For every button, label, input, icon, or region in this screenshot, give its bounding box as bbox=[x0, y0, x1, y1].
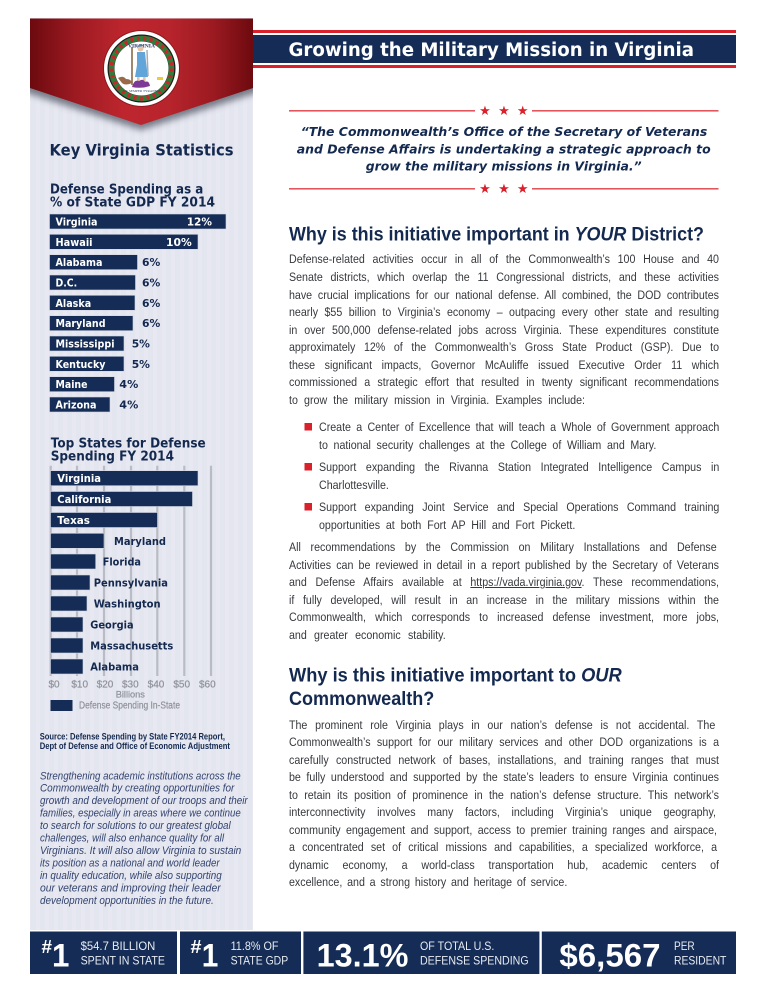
quote text: “The Commonwealth’s Office of the Secretary of Veterans bbox=[301, 125, 708, 140]
stat: spending per resident: PER bbox=[674, 941, 695, 953]
axis labels: $10 bbox=[71, 680, 88, 690]
body text: recommendations paragraph: Commonwealth, which corresponds to increased defense investment, more jobs, bbox=[289, 610, 719, 624]
body text: commonwealth paragraph: Commonwealth’s support for our military services and other DOD organizations is a bbox=[289, 735, 719, 749]
italic sidebar paragraph: growth and development of our troops and their bbox=[40, 795, 249, 807]
chart: defense spending as percent of GDP bbox=[50, 183, 226, 412]
italic sidebar paragraph: development opportunities in the future. bbox=[40, 895, 214, 907]
icon: Virginia state seal bbox=[103, 30, 180, 107]
stat: number one GDP: STATE GDP bbox=[231, 956, 288, 968]
state labels: California bbox=[57, 493, 111, 506]
quote with star dividers bbox=[289, 104, 718, 197]
state labels bbox=[57, 472, 174, 674]
italic sidebar paragraph: challenges, will also enhance quality for all bbox=[40, 832, 224, 844]
axis labels: $50 bbox=[173, 680, 190, 690]
chart heading: Spending FY 2014 bbox=[51, 450, 174, 465]
body text: your district paragraph: Defense-related activities occur in all of the Commonwealth’s 100 House and 40 bbox=[289, 252, 719, 266]
stat: share of defense spending: DEFENSE SPENDING bbox=[420, 956, 529, 968]
axis labels: $60 bbox=[199, 680, 216, 690]
body text: your district paragraph: commissioned a strategic effort that resulted in twenty significant recommendations bbox=[289, 375, 719, 389]
stat: share of defense spending: 13.1% bbox=[317, 938, 408, 974]
bar values: 6% bbox=[142, 317, 160, 330]
stat: number one GDP: 11.8% OF bbox=[231, 941, 278, 953]
heading: key statistics: Key Virginia Statistics bbox=[50, 140, 234, 159]
body text: recommendations paragraph: if fully developed, will result in an increase in the military missions within the bbox=[289, 593, 719, 607]
quote text: and Defense Affairs is undertaking a strategic approach to bbox=[297, 142, 711, 157]
body text: recommendations paragraph: and greater economic stability. bbox=[289, 628, 446, 642]
chart heading: Top States for Defense bbox=[51, 436, 206, 451]
axis labels bbox=[48, 680, 216, 700]
bullet list: opportunities at both Fort AP Hill and Fort Pickett. bbox=[319, 518, 575, 532]
bar labels bbox=[56, 216, 114, 412]
chart: top states for defense spending bbox=[48, 436, 216, 712]
chart heading: Defense Spending as a bbox=[50, 183, 203, 198]
italic sidebar paragraph: Virginians. It will also allow Virginia to sustain bbox=[40, 845, 241, 857]
bottom star divider: ★ bbox=[479, 182, 491, 197]
stat: number one spending bbox=[30, 932, 177, 974]
axis labels: $40 bbox=[148, 680, 165, 690]
body text: commonwealth paragraph: excellence, and a strong history and heritage of service. bbox=[289, 875, 567, 889]
body text: commonwealth paragraph: to retain its position of prominence in the nation’s defense structure. This network’s bbox=[289, 788, 719, 802]
stat: share of defense spending: OF TOTAL U.S. bbox=[420, 941, 494, 953]
bar labels: Virginia bbox=[56, 216, 98, 228]
bar labels: Kentucky bbox=[56, 358, 106, 371]
bullet list: Support expanding Joint Service and Special Operations Command training bbox=[319, 500, 719, 514]
red ribbon with seal bbox=[24, 18, 259, 130]
bar labels: Mississippi bbox=[56, 338, 114, 350]
stat: number one spending: SPENT IN STATE bbox=[81, 956, 165, 968]
chart heading bbox=[51, 436, 206, 465]
bar labels: Hawaii bbox=[56, 236, 92, 249]
bar values: 5% bbox=[132, 358, 150, 371]
heading: our commonwealth bbox=[289, 666, 622, 710]
body text: your district paragraph: Senate districts, which overlap the 11 Congressional districts, and these activities bbox=[289, 270, 719, 284]
header banner bbox=[253, 30, 736, 68]
axis labels: $30 bbox=[122, 680, 139, 690]
state labels: Alabama bbox=[90, 660, 139, 674]
bars bbox=[50, 471, 198, 674]
bar labels: Alabama bbox=[56, 256, 102, 269]
chart heading: % of State GDP FY 2014 bbox=[50, 196, 215, 211]
body text: your district paragraph: approximately 12% of the Commonwealth’s Gross State Product (GSP). Due to bbox=[289, 340, 719, 354]
bar values: 4% bbox=[119, 378, 138, 391]
bullet markers bbox=[304, 423, 312, 510]
bar values: 4% bbox=[119, 398, 138, 412]
bar values: 6% bbox=[142, 276, 160, 290]
body text: your district paragraph: nearly $55 billion to Virginia’s economy – outpacing every other state and resulting bbox=[289, 305, 719, 319]
stat: number one spending: 1 bbox=[52, 938, 69, 974]
bullet list: Support expanding the Rivanna Station Integrated Intelligence Campus in bbox=[319, 460, 719, 474]
chart heading bbox=[50, 183, 215, 211]
state labels: Texas bbox=[57, 514, 90, 527]
bullet list: to national security challenges at the College of William and Mary. bbox=[319, 438, 656, 452]
title: Growing the Military Mission in Virginia bbox=[288, 40, 694, 61]
legend bbox=[50, 700, 180, 712]
bullet list: Create a Center of Excellence that will teach a Whole of Government approach bbox=[319, 420, 719, 434]
bottom star divider: ★ bbox=[517, 182, 529, 197]
italic sidebar paragraph: to search for solutions to our greatest global bbox=[40, 820, 231, 832]
quote text bbox=[297, 125, 711, 175]
bar values bbox=[119, 216, 212, 412]
top star divider: ★ bbox=[498, 104, 510, 119]
body text: commonwealth paragraph: a concentrated set of critical missions and capabilities, a specialized workforce, a bbox=[289, 840, 717, 854]
stat: spending per resident: $6,567 bbox=[559, 938, 660, 974]
heading: our commonwealth: Why is this initiative important to OUR bbox=[289, 666, 622, 687]
italic sidebar paragraph: its position as a national and world leader bbox=[40, 857, 221, 869]
top star divider: ★ bbox=[479, 104, 491, 119]
italic sidebar paragraph: Commonwealth by creating opportunities for bbox=[40, 783, 235, 795]
legend: Defense Spending In-State bbox=[79, 700, 180, 712]
bar values: 10% bbox=[166, 236, 192, 249]
bar labels: Maryland bbox=[56, 317, 106, 330]
stat: spending per resident bbox=[542, 932, 736, 974]
quote text: grow the military missions in Virginia.” bbox=[366, 160, 642, 175]
sidebar panel bbox=[30, 18, 253, 930]
state labels: Florida bbox=[103, 556, 141, 568]
bar values: 5% bbox=[132, 338, 150, 350]
state labels: Virginia bbox=[57, 472, 101, 485]
bar labels: D.C. bbox=[56, 276, 77, 290]
bullet list: Charlottesville. bbox=[319, 478, 389, 492]
state labels: Pennsylvania bbox=[94, 576, 168, 590]
body text: commonwealth paragraph: dynamic economy, a world-class transportation hub, academic centers of bbox=[289, 858, 719, 872]
bottom statistics bar bbox=[30, 932, 736, 974]
body text: recommendations paragraph: Activities can be reviewed in detail in a report published by the Secretary of Veterans bbox=[289, 558, 719, 572]
body text: your district paragraph: to grow the military mission in Virginia. Examples include: bbox=[289, 393, 585, 407]
state labels: Washington bbox=[94, 598, 161, 610]
body text: recommendations paragraph: and Defense Affairs available at https://vada.virginia.gov. These recommendations, bbox=[289, 575, 719, 589]
stat: spending per resident: RESIDENT bbox=[674, 956, 726, 968]
top star divider bbox=[289, 104, 718, 119]
source note bbox=[40, 732, 230, 751]
body text: your district paragraph: have crucial implications for our national defense. All combined, the DOD contributes bbox=[289, 288, 719, 302]
italic sidebar paragraph bbox=[40, 770, 249, 907]
state labels: Maryland bbox=[114, 535, 166, 548]
state labels: Massachusetts bbox=[90, 640, 174, 652]
italic sidebar paragraph: our veterans and improving their leader bbox=[40, 882, 222, 894]
icon: Virginia state seal: SIC SEMPER TYRANNIS bbox=[123, 89, 160, 93]
axis labels: $0 bbox=[48, 680, 60, 690]
bar labels: Maine bbox=[56, 378, 88, 391]
body text: commonwealth paragraph: interconnectivity involves many factors, including Virginia’s unique geography, bbox=[289, 805, 716, 819]
stat: share of defense spending bbox=[303, 932, 539, 974]
italic sidebar paragraph: in quality education, while also supporting bbox=[40, 870, 222, 882]
bottom star divider: ★ bbox=[498, 182, 510, 197]
body text: commonwealth paragraph: be fully understood and supported by the state’s leaders to ensure Virginia continues bbox=[289, 770, 719, 784]
stat: number one GDP: 1 bbox=[202, 938, 218, 974]
bar values: 12% bbox=[187, 216, 212, 228]
state labels: Georgia bbox=[90, 618, 134, 632]
body text: your district paragraph: these significant impacts, Governor McAuliffe issued Executive Order 11 which bbox=[289, 358, 719, 372]
heading: our commonwealth: Commonwealth? bbox=[289, 689, 434, 710]
heading: your district: Why is this initiative important in YOUR District? bbox=[289, 225, 704, 246]
bar labels: Arizona bbox=[56, 398, 96, 412]
bar values: 6% bbox=[142, 256, 160, 269]
bar labels: Alaska bbox=[56, 297, 91, 310]
icon: Virginia state seal: VIRGINIA bbox=[128, 44, 155, 50]
italic sidebar paragraph: families, especially in areas where we continue bbox=[40, 808, 241, 820]
axis labels: Billions bbox=[116, 690, 145, 700]
body text: recommendations paragraph: All recommendations by the Commission on Military Installations and Defense bbox=[289, 540, 717, 554]
body text: commonwealth paragraph: The prominent role Virginia plays in our nation’s defense is not accidental. The bbox=[289, 718, 715, 732]
body text: commonwealth paragraph: carefully constructed network of bases, installations, and training ranges that must bbox=[289, 753, 719, 767]
stat: number one spending: # bbox=[42, 937, 52, 957]
stat: number one GDP bbox=[180, 932, 301, 974]
stat: number one spending: $54.7 BILLION bbox=[81, 941, 155, 953]
body text: your district paragraph: in over 500,000 defense-related jobs across Virginia. These expenditures constitute bbox=[289, 323, 719, 337]
stat: number one GDP: # bbox=[190, 937, 202, 957]
axis labels: $20 bbox=[97, 680, 114, 690]
bottom star divider bbox=[289, 182, 718, 197]
body text: commonwealth paragraph: community engagement and support, access to premier training ranges and airspace, bbox=[289, 823, 717, 837]
top star divider: ★ bbox=[517, 104, 529, 119]
bars bbox=[50, 214, 226, 412]
italic sidebar paragraph: Strengthening academic institutions across the bbox=[40, 770, 241, 782]
bar values: 6% bbox=[142, 297, 160, 310]
source note: Dept of Defense and Office of Economic Adjustment bbox=[40, 741, 230, 751]
source note: Source: Defense Spending by State FY2014 Report, bbox=[40, 732, 225, 742]
